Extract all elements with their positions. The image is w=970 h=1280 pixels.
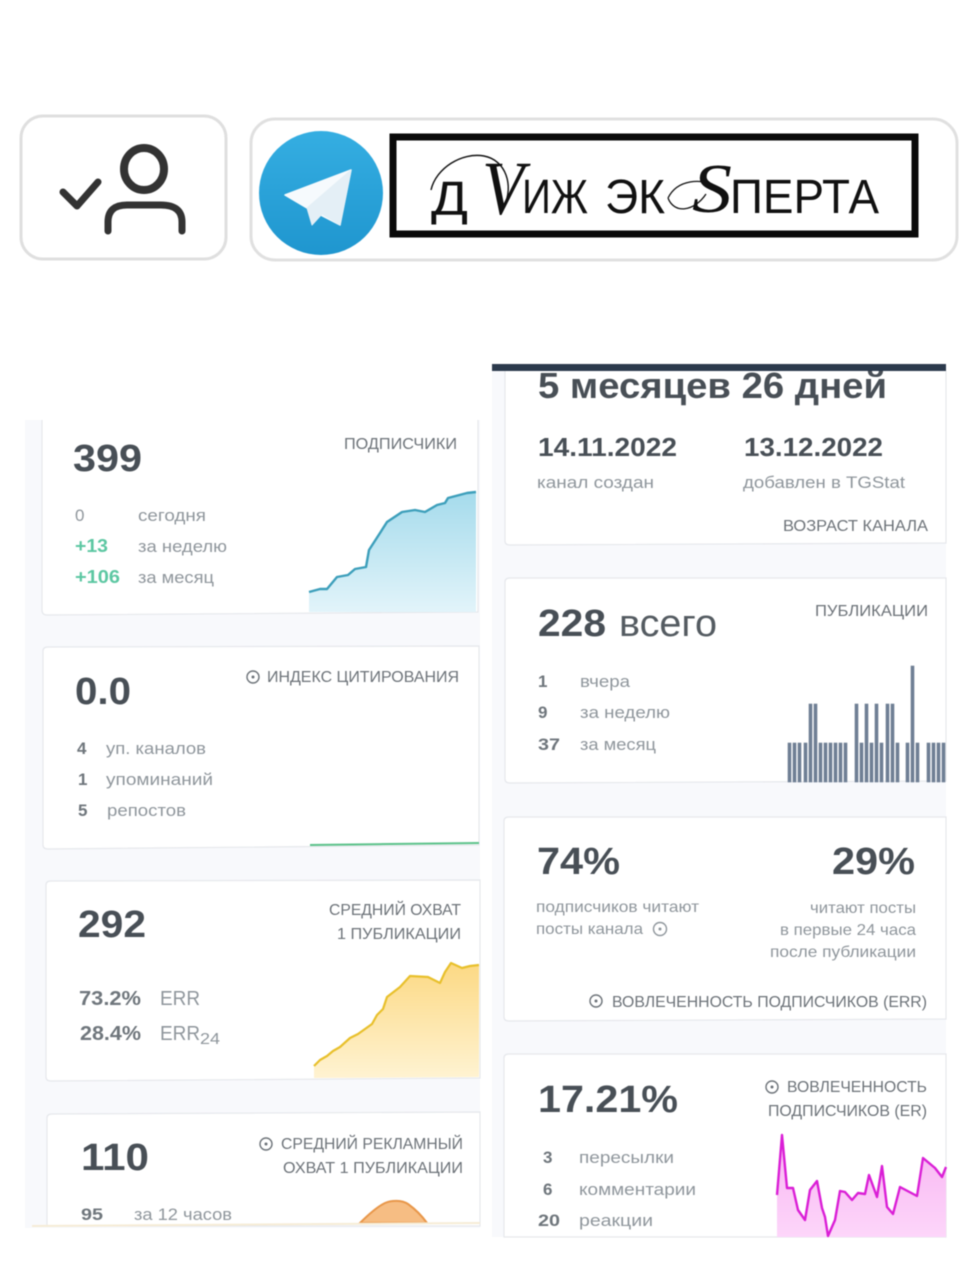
card: subscribers [42, 420, 478, 615]
card: engagement ER: 17.21% [538, 1079, 678, 1121]
card: publications: всего [619, 603, 717, 645]
panel: telegram channel banner [251, 119, 957, 260]
card: publications [505, 578, 946, 783]
card: average ad reach: 95 [81, 1205, 103, 1224]
card: citation index: уп. каналов [106, 739, 206, 758]
channel name box: S [692, 151, 732, 228]
channel name box: Д [431, 173, 468, 226]
card: average reach: 1 ПУБЛИКАЦИИ [337, 926, 461, 943]
card: engagement ERR: после публикации [770, 944, 916, 961]
chart: citation flat line [310, 843, 479, 845]
card: citation index: 5 [78, 801, 87, 820]
icon: person with check mark [63, 148, 182, 231]
card: channel age: ВОЗРАСТ КАНАЛА [783, 518, 928, 535]
card: average reach: ERR [160, 1023, 200, 1045]
card: engagement ERR: посты канала [536, 921, 643, 938]
channel name box [393, 137, 915, 234]
chart: subscribers growth area [309, 492, 476, 612]
card: publications: 1 [538, 672, 547, 691]
card: channel age: 5 месяцев 26 дней [538, 365, 887, 406]
card: citation index: ИНДЕКС ЦИТИРОВАНИЯ [267, 669, 459, 686]
card: average reach [46, 880, 480, 1081]
card: average reach: 292 [78, 904, 146, 946]
card: engagement ER: 3 [543, 1148, 552, 1167]
channel name box: ЭК [605, 171, 665, 224]
card: channel age [505, 365, 946, 545]
panel: right statistics column [492, 364, 946, 1237]
card: engagement ER: ВОВЛЕЧЕННОСТЬ [787, 1079, 927, 1096]
card: average reach: ERR [160, 988, 200, 1010]
card: engagement ER: ПОДПИСЧИКОВ (ER) [768, 1103, 927, 1120]
chart: ad reach area [360, 1201, 427, 1223]
card: engagement ERR: ВОВЛЕЧЕННОСТЬ ПОДПИСЧИКОВ (ERR) [612, 994, 927, 1011]
panel: subscriber check icon button [21, 116, 226, 259]
card: citation index: 0.0 [75, 671, 131, 713]
card: citation index: упоминаний [106, 770, 213, 789]
card: engagement ER: реакции [579, 1211, 653, 1230]
card: engagement ERR: в первые 24 часа [780, 922, 916, 939]
card: subscribers: ПОДПИСЧИКИ [344, 436, 457, 453]
card: subscribers: сегодня [138, 506, 206, 525]
card: engagement ER [504, 1054, 946, 1237]
card: average ad reach [32, 1112, 480, 1226]
card: average reach: СРЕДНИЙ ОХВАТ [329, 900, 461, 919]
card: publications: 9 [538, 703, 547, 722]
card: publications: вчера [580, 672, 631, 691]
icon: help circle [247, 671, 259, 683]
card: publications: 37 [538, 735, 560, 754]
channel name box: ИЖ [522, 171, 588, 224]
card: subscribers: за месяц [138, 568, 214, 587]
card: average ad reach: за 12 часов [134, 1205, 232, 1224]
panel: left statistics column [25, 420, 480, 1228]
card: citation index: репостов [107, 801, 186, 820]
card: engagement ER: пересылки [579, 1148, 674, 1167]
card: engagement ERR: читают посты [810, 900, 916, 917]
card: average ad reach: ОХВАТ 1 ПУБЛИКАЦИИ [283, 1160, 463, 1177]
card: average reach: 73.2% [79, 988, 141, 1010]
chart: publications bars [788, 666, 945, 782]
card: engagement ERR: подписчиков читают [536, 899, 700, 916]
channel name box: V [482, 147, 531, 231]
card: engagement ER: комментарии [579, 1180, 696, 1199]
card: publications: ПУБЛИКАЦИИ [815, 603, 928, 620]
card: engagement ER: 20 [538, 1211, 560, 1230]
card: average reach: 24 [200, 1031, 220, 1048]
icon: help circle [654, 922, 666, 936]
card: engagement ER: 6 [543, 1180, 552, 1199]
top dark bar [492, 364, 946, 371]
card: engagement ERR: 29% [832, 841, 915, 883]
chart: reach area [314, 963, 479, 1078]
card: publications: за неделю [580, 703, 670, 722]
card: publications: 228 [538, 603, 606, 645]
card: subscribers: +13 [75, 536, 108, 556]
icon: help circle [590, 995, 602, 1007]
chart: engagement area [777, 1135, 946, 1237]
icon: help circle [260, 1138, 272, 1150]
card: citation index [43, 646, 479, 849]
icon: help circle [766, 1081, 778, 1093]
card: engagement ERR: 74% [537, 841, 620, 883]
card: subscribers: 0 [75, 506, 84, 525]
card: subscribers: за неделю [138, 537, 227, 556]
icon: telegram logo [259, 131, 383, 255]
channel name box: ПЕРТА [730, 171, 879, 224]
card: average ad reach: 110 [81, 1137, 149, 1179]
card: channel age: 14.11.2022 [538, 432, 677, 462]
card: citation index: 1 [78, 770, 87, 789]
card: average reach: 28.4% [80, 1023, 141, 1045]
card: average ad reach: СРЕДНИЙ РЕКЛАМНЫЙ [281, 1134, 463, 1153]
card: channel age: 13.12.2022 [744, 432, 883, 462]
card: channel age: канал создан [537, 473, 654, 492]
card: subscribers: 399 [73, 438, 142, 480]
card: publications: за месяц [580, 735, 656, 754]
card: engagement ERR [504, 817, 946, 1021]
card: channel age: добавлен в TGStat [743, 473, 905, 492]
card: subscribers: +106 [75, 567, 120, 587]
card: citation index: 4 [77, 739, 87, 758]
